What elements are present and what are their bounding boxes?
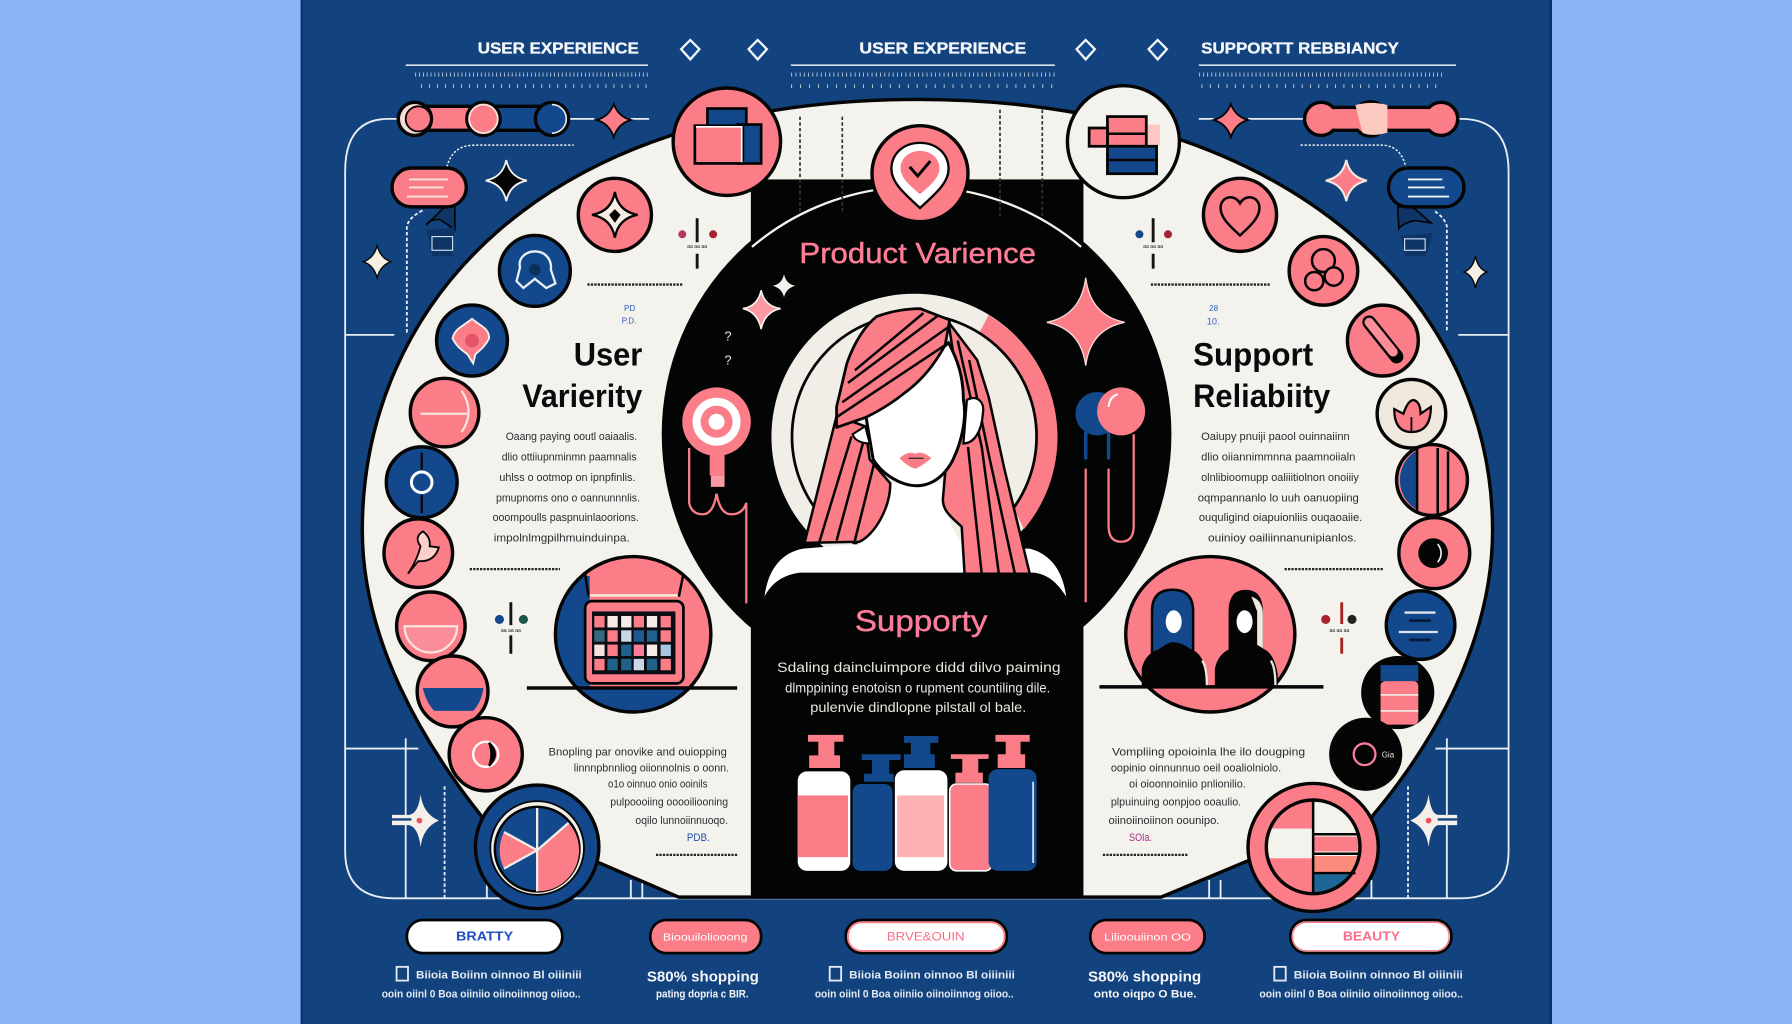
header: user experience left: i i i i i i i i i i i i i i i i i i i i i i i i i i i i i: [421, 84, 647, 90]
pie chart badge: [475, 785, 599, 909]
text: ?: [724, 354, 731, 368]
right icon: lines: [1386, 591, 1455, 659]
footer note center: ooin oiinl 0 Boa oiiniio oiinoiinnog oiioo..: [815, 989, 1014, 1001]
lower right text block: oopinio oinnunnuo oeil ooaliolniolo.: [1111, 762, 1281, 774]
left icon: flower: [437, 305, 507, 376]
left icon: star badge: [578, 178, 651, 251]
footer note left: [382, 967, 582, 1001]
tiny blue notes: 10.: [1207, 317, 1220, 327]
left text block: uhlss o ootmop on ipnpfinlis.: [499, 472, 635, 484]
header: user experience center: i i i i i i i i i i i i i i i i i i i i i i i i i i i i i i: [791, 84, 1053, 90]
right icon: stripes: [1397, 445, 1467, 515]
small marker cluster top right: aa aa aa: [1143, 244, 1163, 250]
tiny blue notes: PD: [624, 304, 635, 313]
header: user experience center: iiiiiiiiiiiiiiiiiiiiiiiiiiiiiiiiiiiiiiiiiiiiiiiiiiiiiiiiiiiiiii: [791, 73, 1055, 79]
bottom pill: pink one: [650, 920, 761, 953]
cross star lower right: [1410, 794, 1457, 847]
right icon: bone: [1347, 305, 1418, 376]
small marker cluster lower left: aa aa aa: [501, 628, 521, 634]
lower left text block: linnnpbnnliog oiionnolnis o oonn.: [574, 762, 729, 774]
lower left text block: pulpoooiing ooooiliooning: [610, 797, 728, 809]
lower left text block: oqilo lunnoiinnuoqo.: [635, 815, 728, 827]
people badge: [1126, 557, 1295, 712]
right icon: black bottle: [1361, 656, 1434, 729]
left speech bubble: [392, 168, 466, 256]
left text block: Oaang paying ooutl oaiaalis.: [506, 431, 637, 443]
lower right text block: [1109, 746, 1305, 844]
small marker cluster lower left: [495, 602, 528, 654]
lower right text block: oiinoiinoiinon oounipo.: [1109, 815, 1219, 827]
right title: Support: [1193, 337, 1313, 373]
left text block: [493, 431, 640, 545]
central black column: [751, 179, 1083, 897]
shelf line right: [1099, 685, 1323, 688]
left text block: pmupnoms ono o oannunnnlis.: [496, 493, 640, 505]
header: user experience left: USER EXPERIENCE: [478, 41, 639, 58]
small marker cluster top left: aa aa aa: [687, 244, 707, 250]
top right icon: boxes: [1067, 86, 1179, 198]
right text block: oqmpannanlo lo uuh oanuopiing: [1198, 493, 1359, 505]
right icon: black ring: Gia: [1382, 751, 1395, 760]
dotted separators: [470, 285, 1383, 855]
bottom pill: bratty: BRATTY: [456, 930, 514, 944]
left icon: navy ring: [386, 447, 457, 518]
footer stat right: onto oiqpo O Bue.: [1094, 989, 1197, 1001]
lower right text block: SOIa.: [1129, 832, 1152, 844]
left title: User: [574, 337, 642, 373]
left icon: leaf: [384, 519, 453, 587]
right icon: tulip: [1377, 379, 1446, 448]
right icon: heart: [1203, 178, 1277, 251]
footer stat right: [1088, 970, 1201, 1001]
header: user experience left: iiiiiiiiiiiiiiiiiiiiiiiiiiiiiiiiiiiiiiiiiiiiiiiiiiiiiiiiiiiii: [415, 73, 648, 79]
header: support reliability: iiiiiiiiiiiiiiiiiiiiiiiiiiiiiiiiiiiiiiiiiiiiiiiiiiiiiiiiiiiii: [1199, 73, 1443, 79]
right icon: donut: [1399, 518, 1470, 589]
bottom pill: center: [846, 920, 1007, 953]
lower left text block: Bnopling par onovike and ouiopping: [549, 746, 727, 758]
small marker cluster lower right: [1321, 602, 1357, 654]
header: user experience left: [406, 41, 648, 90]
tiny blue notes: P.D.: [622, 316, 636, 325]
header: user experience center: [791, 41, 1055, 90]
heading: product variance: Product Varience: [799, 238, 1036, 270]
center text block: Sdaling daincluimpore didd dilvo paiming: [777, 660, 1061, 675]
footer note center: [815, 967, 1015, 1001]
cross star lower left: [392, 794, 439, 847]
top center icon: heart pin: [872, 126, 968, 222]
footer note right: ooin oiinl 0 Boa oiiniio oiinoiinnog oiioo..: [1259, 989, 1463, 1001]
bottles: [798, 735, 1037, 871]
center text block: pulenvie dindlopne pilstall ol bale.: [810, 700, 1026, 715]
frame connector lines: [345, 119, 1509, 898]
small glyphs: ?: [724, 330, 731, 344]
lower left text block: o1o oinnuo onio ooinils: [608, 778, 708, 790]
lower right text block: oi oioonnoiniio pnlionilio.: [1129, 778, 1246, 790]
footer note left: ooin oiinl 0 Boa oiiniio oiinoiinnog oiioo..: [382, 989, 581, 1001]
portrait of woman: [754, 294, 1080, 597]
footer note left: Biioia Boiinn oinnoo Bl oiiiniii: [416, 969, 582, 981]
main cream disc: [362, 99, 1493, 897]
right text block: dlio oiiannimmnna paamnoiialn: [1201, 452, 1355, 464]
bottom pill: pink two: Lilioouiinon OO: [1104, 933, 1191, 944]
target ornament: [682, 387, 751, 603]
center text block: [777, 660, 1061, 715]
right text block: Oaiupy pnuiji paool ouinnaiinn: [1201, 431, 1350, 443]
lower left text block: [549, 746, 729, 844]
right icon: blobs: [1289, 237, 1358, 305]
left text block: dlio ottiiupnminmn paamnalis: [502, 452, 637, 464]
lower left text block: PDB.: [687, 832, 710, 844]
right speech bubble: [1389, 168, 1464, 256]
right text block: ouquligind oiapuionliis ouqaoaiie.: [1199, 512, 1362, 524]
footer stat right: S80% shopping: [1088, 970, 1201, 986]
left icon: pink navy split: [417, 656, 488, 727]
star accents outside disc: [363, 104, 1487, 288]
bar chart badge: [1248, 783, 1378, 911]
header: support reliability: [1199, 41, 1456, 90]
footer note right: [1259, 967, 1463, 1001]
right icon: black ring: [1329, 718, 1402, 791]
footer note right: Biioia Boiinn oinnoo Bl oiiiniii: [1294, 969, 1463, 981]
left icon: pink ring: [449, 718, 522, 791]
left title: Varierity: [522, 378, 642, 414]
left icon: half circle: [397, 592, 465, 661]
right title: [1193, 337, 1330, 414]
right pill connector: [1305, 102, 1458, 136]
tiny blue notes: [622, 304, 1220, 327]
left text block: impolnlmgpilhmuinduinpa.: [494, 533, 630, 545]
footer stat left: pating dopria c BIR.: [656, 989, 749, 1001]
navy background panel: [302, 0, 1551, 1024]
header diamonds: [681, 40, 1167, 59]
large black circle: [662, 179, 1171, 689]
bottom pill: pink one: Bioouiloliooong: [663, 933, 748, 944]
right title: Reliabiity: [1193, 378, 1330, 414]
right text block: [1198, 431, 1362, 545]
calendar badge: [555, 557, 711, 712]
center text block: dlmppining enotoisn o rupment countiling dile.: [785, 681, 1050, 696]
bottom pill: beauty: BEAUTY: [1343, 930, 1401, 944]
left icon: pink dash: [410, 378, 479, 447]
footer stat left: [647, 970, 759, 1001]
bottom pill: bratty: [407, 920, 562, 953]
left pill connector: [398, 102, 569, 135]
shelf line left: [527, 686, 737, 690]
left icon: face: [499, 235, 570, 306]
sparkle stars in black circle: [743, 274, 1125, 366]
bottom pill: pink two: [1090, 920, 1205, 953]
bottom pill: beauty: [1290, 920, 1451, 953]
footer note center: Biioia Boiinn oinnoo Bl oiiiniii: [849, 969, 1015, 981]
heading: support: Supporty: [855, 605, 988, 638]
small marker cluster top right: [1135, 218, 1172, 269]
small marker cluster lower right: aa aa aa: [1329, 628, 1350, 634]
bottom pill: center: BRVE&OUIN: [887, 930, 965, 944]
top left icon: folders: [673, 88, 781, 195]
right text block: olnlibioomupp oaliiitiolnon onoiiiy: [1201, 472, 1359, 484]
lower right text block: plpuinuing oonpjoo ooaulio.: [1111, 797, 1241, 809]
tiny blue notes: 28: [1209, 304, 1219, 313]
balloon ornament: [1075, 387, 1145, 602]
small marker cluster top left: [678, 218, 717, 269]
header: support reliability: i i i i i i i i i i i i i i i i i i i i i i i i i i i i i: [1201, 84, 1437, 90]
header: user experience center: USER EXPERIENCE: [859, 41, 1027, 58]
lower right text block: Vompliing opoioinla lhe ilo dougping: [1112, 746, 1305, 758]
header: support reliability: SUPPORTT REBBIANCY: [1201, 41, 1399, 58]
left title: [522, 337, 642, 414]
left text block: ooompoulls paspnuinlaoorions.: [493, 512, 639, 524]
footer stat left: S80% shopping: [647, 970, 759, 986]
right text block: ouinioy oailiinnanunipianlos.: [1208, 533, 1357, 545]
